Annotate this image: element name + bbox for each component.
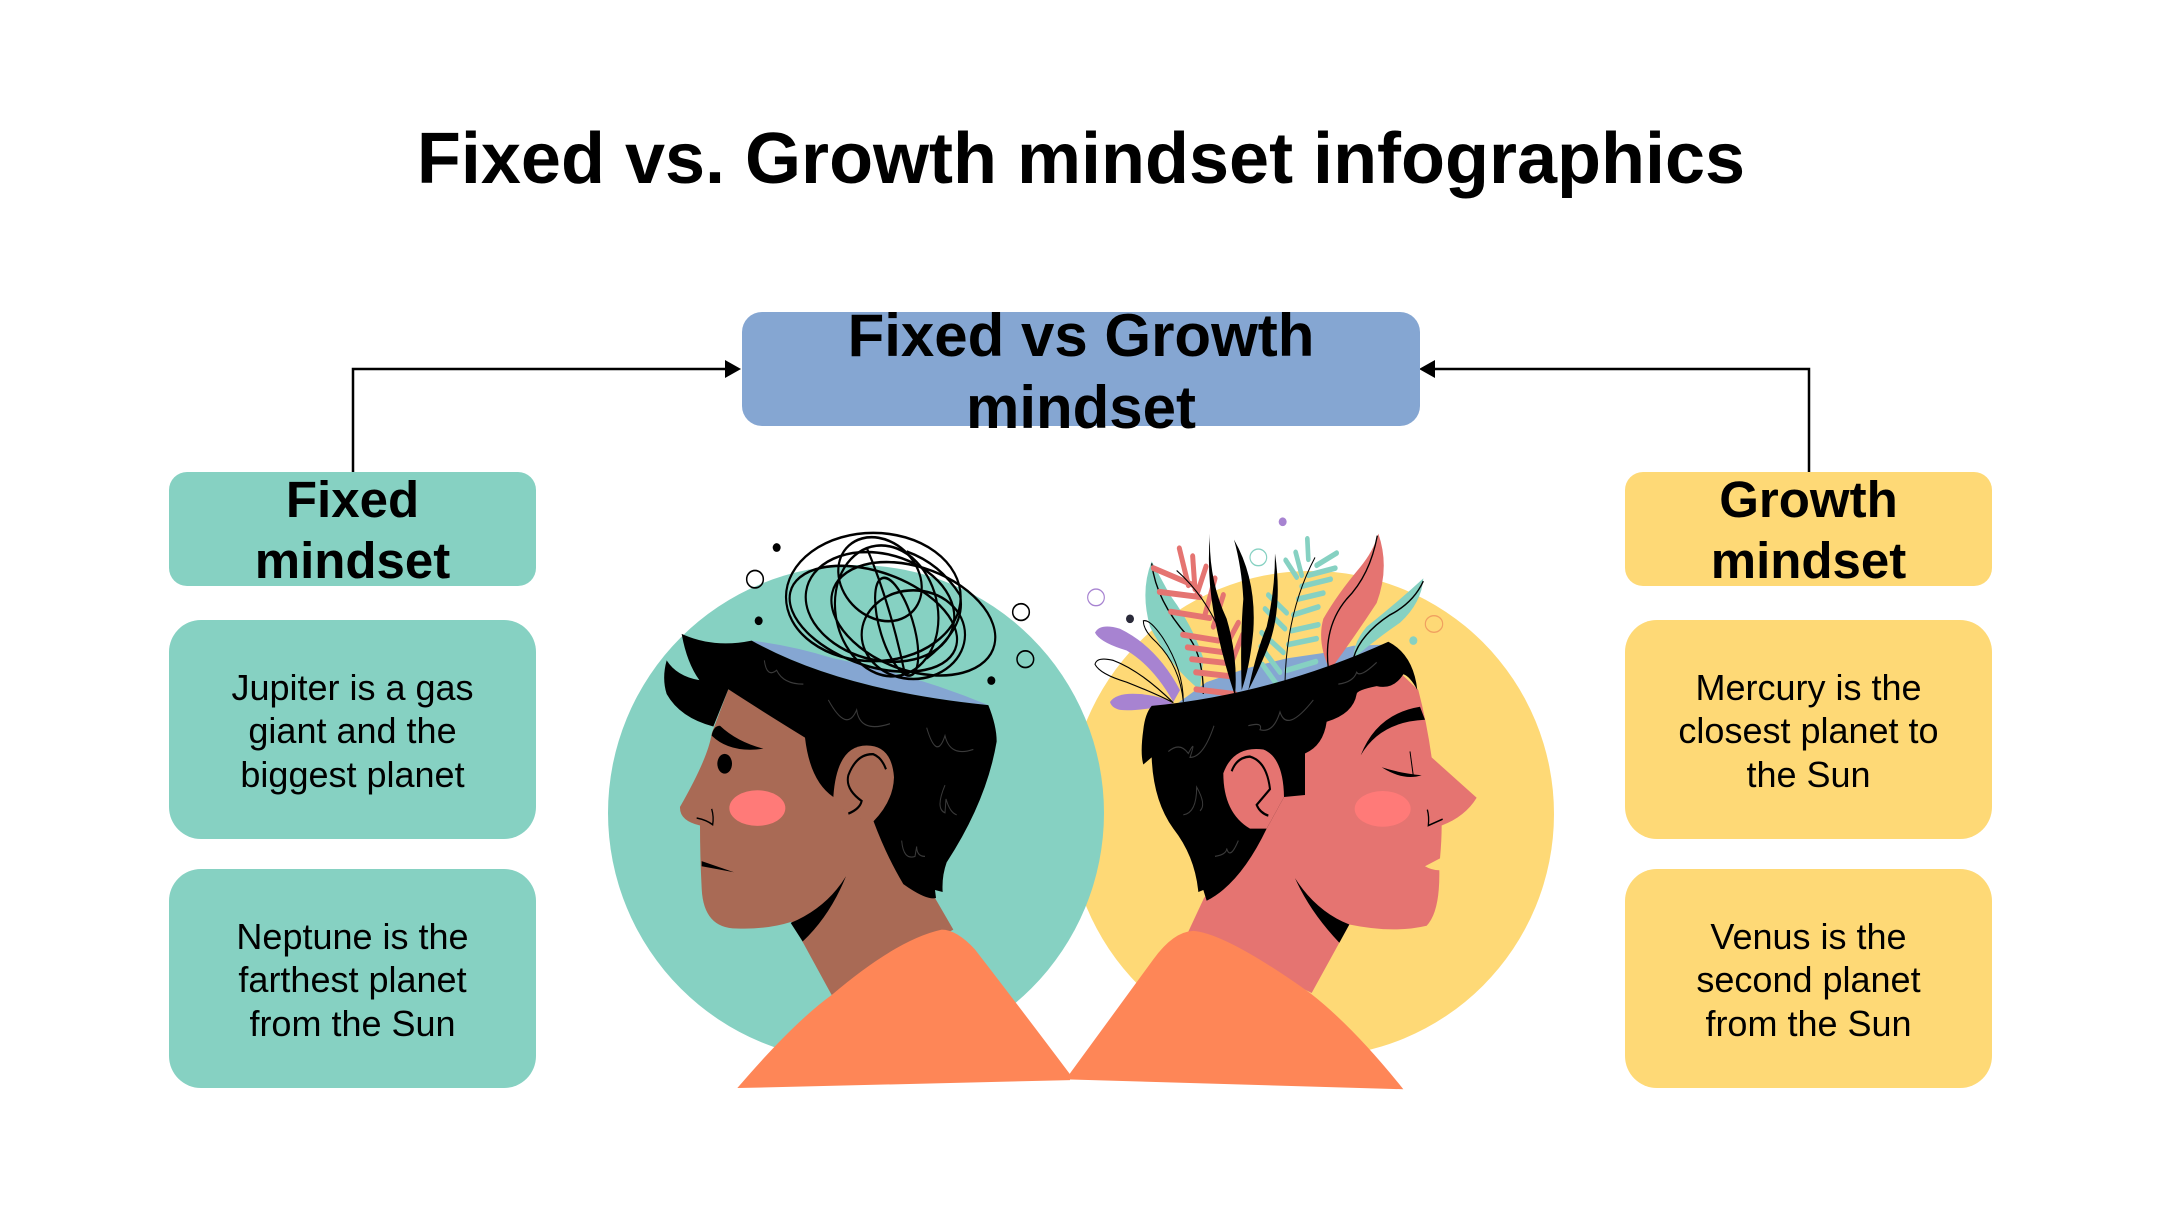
teal fern stem <box>1285 557 1315 682</box>
card text <box>1678 667 1939 795</box>
teal fern <box>1261 539 1337 684</box>
bubbles <box>747 570 1034 668</box>
card text: Neptune is the <box>236 916 469 957</box>
eyebrow <box>1361 707 1425 755</box>
shirt <box>1067 931 1403 1089</box>
panel: fixed card 1 <box>169 620 536 839</box>
ear line <box>1232 757 1270 816</box>
eye <box>717 754 732 774</box>
card text: the Sun <box>1746 754 1871 795</box>
center heading text <box>848 302 1314 441</box>
card text: Mercury is the <box>1695 667 1922 708</box>
card text: from the Sun <box>249 1003 456 1044</box>
panel: fixed mindset heading <box>169 472 536 586</box>
background circle: yellow <box>1068 571 1554 1057</box>
purple leaves <box>1095 626 1180 710</box>
cheek <box>1355 791 1411 827</box>
card text: Jupiter is a gas <box>231 667 474 708</box>
card text: biggest planet <box>240 754 465 795</box>
open head cap <box>1178 645 1388 703</box>
neck and face <box>680 689 953 995</box>
eyelash <box>1410 751 1413 776</box>
hair texture <box>1168 662 1377 856</box>
panel: growth mindset heading <box>1625 472 1992 586</box>
panel: growth card 2 <box>1625 869 1992 1088</box>
shirt <box>737 930 1070 1088</box>
panel: fixed card 2 <box>169 869 536 1088</box>
ear line <box>848 754 886 814</box>
coral fern <box>1153 548 1243 694</box>
head: growth mindset with plants <box>1067 517 1477 1089</box>
hair <box>664 634 997 898</box>
open head cap <box>752 641 988 705</box>
cheek <box>729 790 785 826</box>
panel: center heading <box>742 312 1420 426</box>
tangled scribble <box>780 522 1006 699</box>
neck and face <box>1188 666 1477 993</box>
coral leaf <box>1321 534 1384 670</box>
mouth <box>702 861 734 872</box>
ear <box>1223 749 1284 829</box>
nose line <box>1427 810 1443 826</box>
closed eye <box>1382 767 1422 777</box>
outlined leaves <box>1095 621 1183 703</box>
dots <box>1126 517 1417 645</box>
center heading text: mindset <box>966 374 1196 441</box>
jaw shadow <box>791 876 846 942</box>
head: fixed mindset with tangled scribble <box>664 522 1070 1088</box>
growth mindset text: Growth <box>1719 471 1898 528</box>
background circle: teal <box>608 565 1104 1061</box>
card text: Venus is the <box>1710 916 1907 957</box>
hair <box>1142 642 1417 901</box>
eyebrow <box>712 726 763 750</box>
fixed mindset text <box>255 471 450 589</box>
teal leaf left <box>1145 561 1203 690</box>
growth mindset text: mindset <box>1711 532 1906 589</box>
leaf vein <box>1152 563 1203 694</box>
teal leaf right <box>1353 578 1423 658</box>
card text <box>231 667 474 795</box>
jaw shadow <box>1295 878 1349 943</box>
card text: farthest planet <box>238 959 467 1000</box>
fern stem <box>1177 570 1235 694</box>
card text: closest planet to <box>1678 710 1939 751</box>
bubbles <box>1088 549 1443 632</box>
center heading text: Fixed vs Growth <box>848 302 1314 369</box>
coral leaf vein <box>1327 536 1377 668</box>
card text <box>236 916 469 1044</box>
title: Fixed vs. Growth mindset infographics <box>417 119 1745 199</box>
fixed mindset text: Fixed <box>286 471 419 528</box>
dots <box>755 543 995 685</box>
card text: giant and the <box>248 710 457 751</box>
teal leaf vein <box>1353 581 1423 658</box>
black leaves <box>1209 534 1278 696</box>
fixed mindset text: mindset <box>255 532 450 589</box>
growth mindset text <box>1711 471 1906 589</box>
card text: second planet <box>1696 959 1921 1000</box>
card text: from the Sun <box>1705 1003 1912 1044</box>
card text <box>1696 916 1921 1044</box>
nose line <box>697 809 713 825</box>
hair texture <box>764 660 973 857</box>
ear <box>833 746 894 822</box>
panel: growth card 1 <box>1625 620 1992 839</box>
